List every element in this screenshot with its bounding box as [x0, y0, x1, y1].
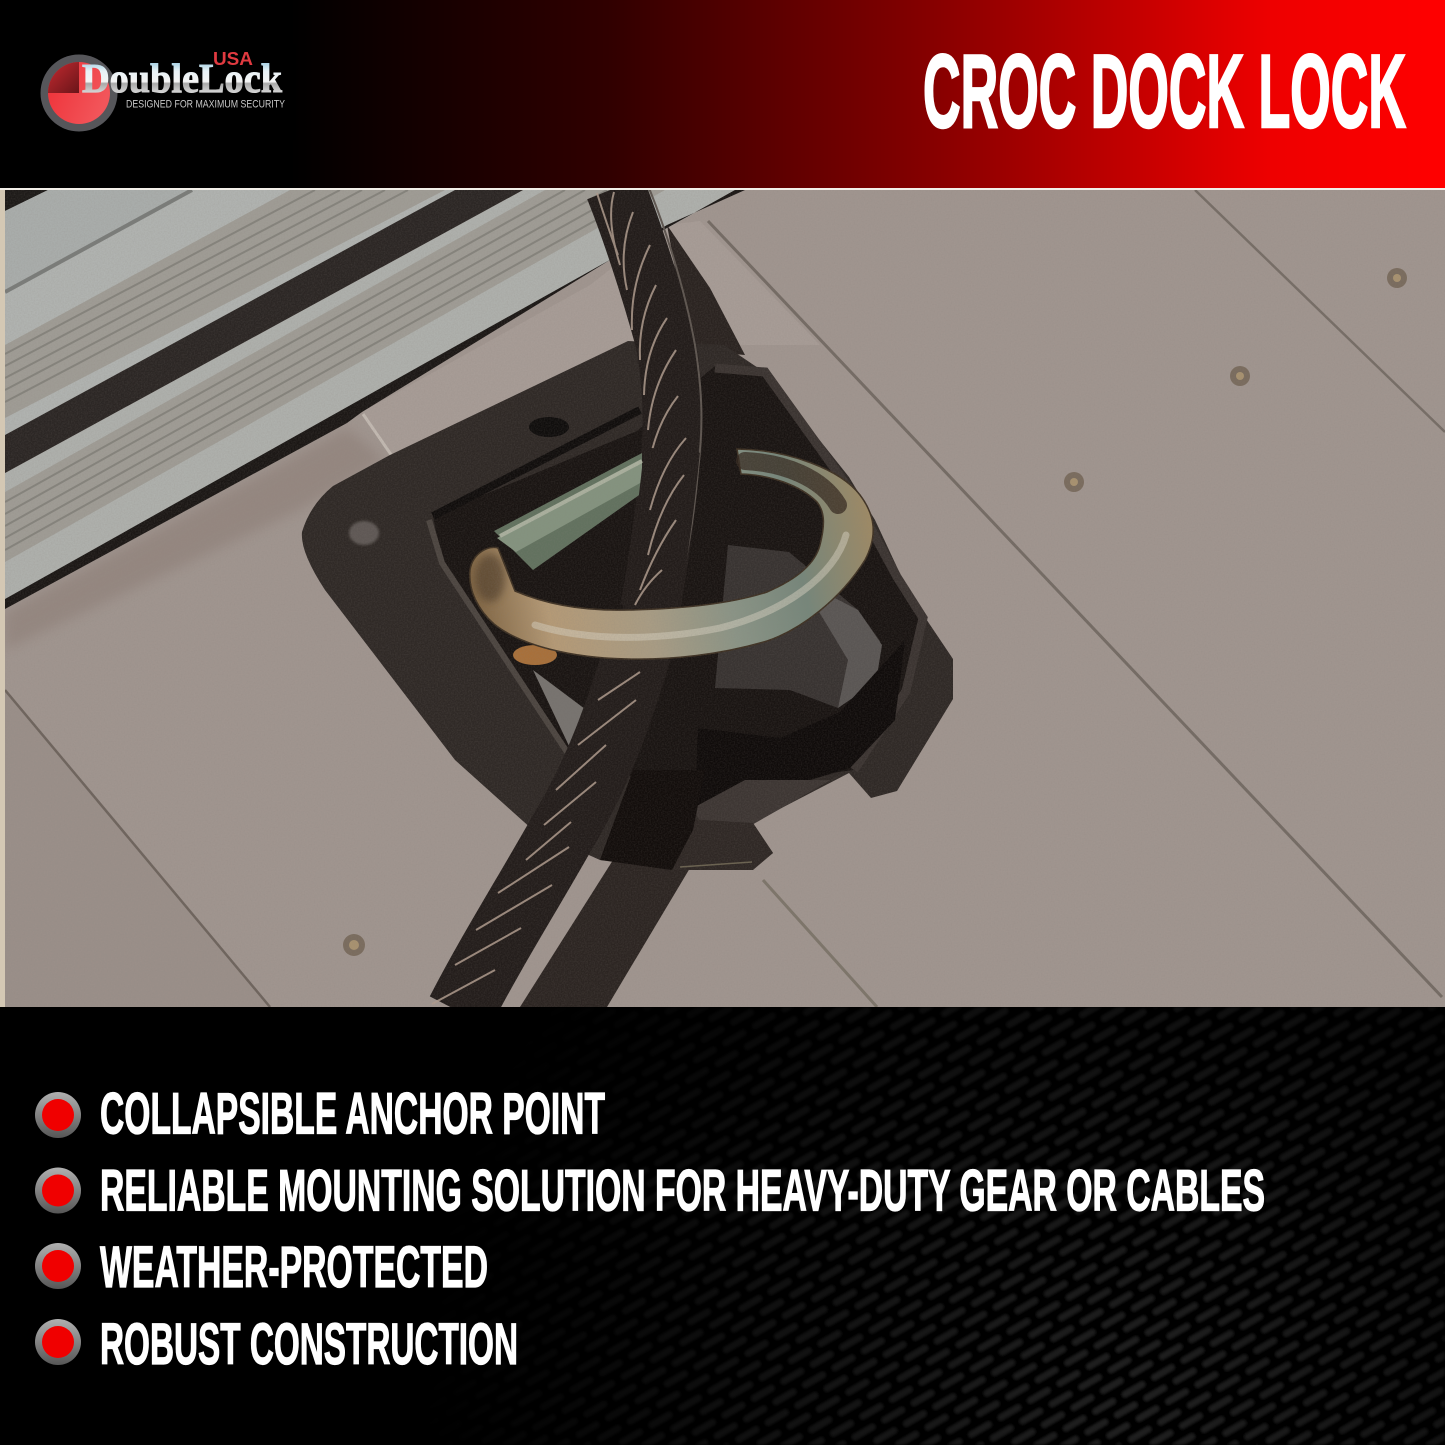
D-ring back bar: [494, 453, 642, 570]
pocket rim: [429, 520, 567, 752]
logo: DoubleLock: [36, 44, 296, 140]
logo USA mark: USA: [213, 49, 253, 69]
deck planks: [5, 190, 1445, 1007]
bullet: robust construction: [35, 1312, 518, 1377]
wear speckle near gap: [5, 428, 385, 650]
bullet: weather-protected: WEATHER-PROTECTED: [100, 1235, 488, 1300]
logo wordmark: DoubleLock: [82, 55, 282, 101]
cast shadows: [520, 225, 745, 1007]
carbon weave texture: [590, 1007, 1445, 1445]
plank seams: [5, 190, 1445, 1007]
steel cable: over bar: [635, 438, 686, 615]
bullet: robust construction: ROBUST CONSTRUCTION: [100, 1312, 518, 1377]
grey ridged boards: [5, 190, 745, 609]
top board: [5, 190, 460, 436]
ridge lines: [5, 190, 650, 550]
screw hole: [529, 417, 569, 437]
logo ring icon: [40, 54, 118, 132]
lower board: [5, 190, 735, 600]
recessed mounting plate: [302, 341, 953, 870]
pocket: [433, 366, 923, 790]
photo: dock lock on deck: [5, 188, 1445, 1012]
lug block: [688, 820, 773, 870]
deck screws: [343, 268, 1407, 956]
feature panel: [0, 1007, 1445, 1445]
surface grain: [5, 190, 953, 1007]
black band under cable: [600, 776, 698, 870]
gap below lower board: [5, 190, 745, 609]
header rule and left frame strip: [0, 188, 1445, 1007]
header band: [0, 0, 1445, 188]
rust fragments: [513, 645, 557, 665]
bullet: collapsible anchor point: [35, 1082, 605, 1146]
logo tagline: DESIGNED FOR MAXIMUM SECURITY: [126, 98, 286, 110]
bullet: collapsible anchor point: COLLAPSIBLE ANCHOR POINT: [100, 1082, 605, 1146]
steel cable: upper section: [597, 188, 701, 610]
D-ring front arc: [470, 449, 873, 659]
grey disc inside pocket: [715, 545, 880, 708]
black shadow arc: [695, 640, 905, 808]
gap between boards: [5, 190, 523, 473]
grey lug arm: [696, 776, 838, 824]
steel cable: lower section: [432, 650, 640, 1012]
bullet: weather-protected: [35, 1235, 488, 1300]
